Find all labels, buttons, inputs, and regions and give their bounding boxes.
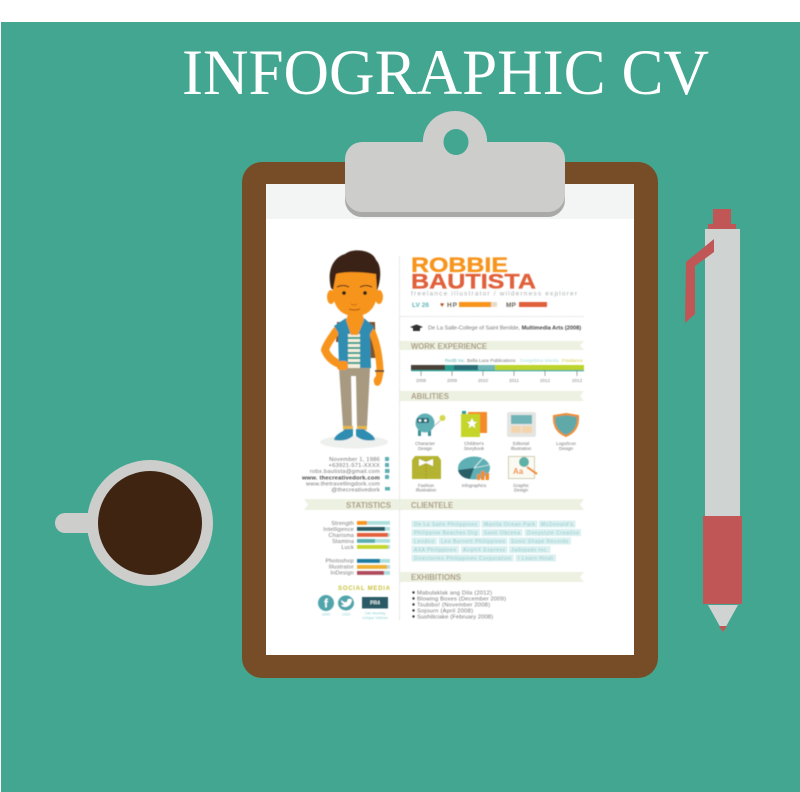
heading: statistics: STATISTICS	[346, 501, 391, 510]
clientele tags: De La Salle Philippines	[414, 522, 478, 528]
name: BAUTISTA	[411, 270, 536, 294]
contact details: November 1, 1986	[329, 457, 380, 463]
clientele tags: Directories Philippines Corporation	[414, 556, 511, 562]
work timeline: Freelance	[562, 358, 583, 363]
personal stats labels: Photoshop	[325, 558, 354, 564]
exhibitions list: Sushiliciake (February 2008)	[417, 614, 493, 620]
clientele tags	[412, 520, 581, 562]
work timeline: 2013	[572, 378, 583, 383]
personal stats labels: Illustrator	[329, 564, 354, 570]
paper sheet	[266, 184, 634, 655]
ability labels row two: Design	[514, 488, 528, 492]
personal stats labels: InDesign	[330, 570, 354, 576]
work timeline: 2012	[540, 378, 551, 383]
work timeline: RedB Inc.	[445, 358, 466, 363]
level and HP MP bars: LV 26	[412, 302, 429, 309]
clientele tags: Manila Ocean Park	[484, 522, 536, 528]
clientele tags: Jadopado Inc.	[511, 548, 548, 554]
clipboard clip	[345, 111, 565, 217]
heading: clientele: CLIENTELE	[411, 501, 453, 510]
ability labels row one: Design	[559, 446, 573, 451]
personal stats labels: Luck	[341, 545, 354, 551]
exhibitions list	[412, 590, 506, 620]
icon: logo and icon design	[554, 414, 578, 436]
clientele tags: AirphX Express	[463, 548, 506, 554]
icon: children's storybook	[461, 411, 487, 437]
work timeline	[411, 358, 584, 383]
contact details: +63921-571-XXXX	[328, 463, 380, 469]
level and HP MP bars: HP	[447, 302, 458, 309]
exhibitions list: Sojourn (April 2008)	[417, 608, 473, 614]
vertical dotted divider	[398, 256, 400, 620]
personal stats labels: Charisma	[328, 533, 355, 539]
heading: abilities	[400, 391, 584, 401]
social media badges: f	[324, 596, 329, 610]
ability labels row one: Children's	[464, 441, 485, 446]
ability labels row two	[416, 483, 530, 492]
heading: statistics	[304, 499, 399, 510]
contact details: @thecreativedork	[331, 488, 380, 494]
exhibitions list: Blowing Boxes (December 2009)	[417, 596, 506, 602]
work timeline: 2008	[416, 378, 427, 383]
heading: abilities: ABILITIES	[411, 392, 449, 401]
clipboard board	[242, 162, 658, 678]
social media badges: 13K Monthly	[364, 612, 386, 616]
contact details: robx.bautista@gmail.com	[310, 469, 380, 475]
pen	[685, 209, 742, 632]
social media badges: PR4	[370, 600, 380, 606]
ability labels row two: Infographics	[462, 483, 487, 488]
heading: exhibitions	[400, 572, 584, 582]
icon: editorial illustration	[507, 412, 536, 437]
work timeline: Bella Luce Publications	[467, 358, 516, 363]
clientele tags: Donystyle Creative	[527, 530, 579, 536]
coffee cup	[55, 460, 213, 586]
clientele tags: Sanii Obcena	[484, 530, 520, 536]
education line: De La Salle-College of Saint Benilde, Multimedia Arts (2008)	[428, 326, 581, 332]
work timeline: Designblue Manila	[520, 358, 559, 363]
heading: work experience	[400, 341, 584, 351]
exhibitions list: Tsubibo! (November 2008)	[417, 602, 490, 608]
contact details: www. thecreativedork.com	[301, 476, 380, 482]
icon: fashion illustration	[412, 456, 441, 479]
social media badges: 1890	[322, 612, 330, 616]
personal stats labels: Strength	[331, 521, 354, 527]
level and HP MP bars: ♥	[440, 302, 444, 309]
work timeline: 2010	[478, 378, 489, 383]
clientele tags: AXA Philippines	[414, 548, 456, 554]
clientele tags: Lendco	[414, 539, 434, 545]
ability labels row two: Fashion	[418, 483, 434, 488]
social media badges: 1302	[342, 612, 350, 616]
level and HP MP bars	[412, 302, 547, 309]
level and HP MP bars: MP	[506, 302, 517, 309]
clientele tags: I Learn Hindi	[518, 556, 553, 562]
icon: graphic design: Aa	[513, 467, 524, 476]
social media badges: Unique Visitors	[362, 616, 388, 620]
stat bars	[357, 521, 390, 575]
icon: character design	[416, 414, 446, 436]
heading: work experience: WORK EXPERIENCE	[411, 342, 487, 351]
contact details	[301, 457, 380, 494]
icon: graphic design	[508, 456, 537, 478]
work timeline: 2009	[447, 378, 458, 383]
clientele tags: McDonald's	[541, 522, 574, 528]
exhibitions list: Mabulaklak ang Dila (2012)	[417, 590, 492, 596]
work timeline: 2011	[509, 378, 519, 383]
clientele tags: Leo Burnett Philippines	[441, 539, 506, 545]
ability labels row two: Graphic	[513, 483, 530, 488]
personal stats labels: Stamina	[332, 539, 355, 545]
tagline: freelance illustrator / wilderness explorer	[411, 290, 578, 298]
personal stats labels	[323, 521, 355, 576]
personal stats labels: Intelligence	[323, 527, 354, 533]
ability labels row one	[415, 441, 576, 451]
ability labels row one: Logo/Icon	[556, 441, 576, 446]
ability labels row one: Illustration	[511, 446, 532, 451]
CV content	[301, 250, 584, 620]
clientele tags: Philippine Beaches Org	[414, 530, 477, 536]
ability labels row one: Storybook	[464, 446, 485, 451]
name: ROBBIE	[411, 254, 508, 277]
heading: social media: SOCIAL MEDIA	[338, 586, 391, 592]
ability labels row one: Editorial	[513, 441, 529, 446]
name	[411, 254, 536, 294]
contact details: www.thetravellingdork.com	[305, 482, 380, 488]
contact icons	[385, 457, 390, 490]
ability labels row one: Design	[418, 446, 432, 451]
social media badges	[318, 595, 388, 620]
clientele tags: Sonic Shape Records	[511, 539, 568, 545]
heading: clientele	[400, 499, 584, 510]
character illustration	[320, 250, 388, 448]
ability labels row one: Character	[415, 441, 435, 446]
ability labels row two: Illustration	[416, 488, 437, 492]
icon: infographics	[458, 456, 490, 480]
heading: exhibitions: EXHIBITIONS	[411, 573, 461, 582]
title: INFOGRAPHIC CV	[182, 37, 709, 109]
